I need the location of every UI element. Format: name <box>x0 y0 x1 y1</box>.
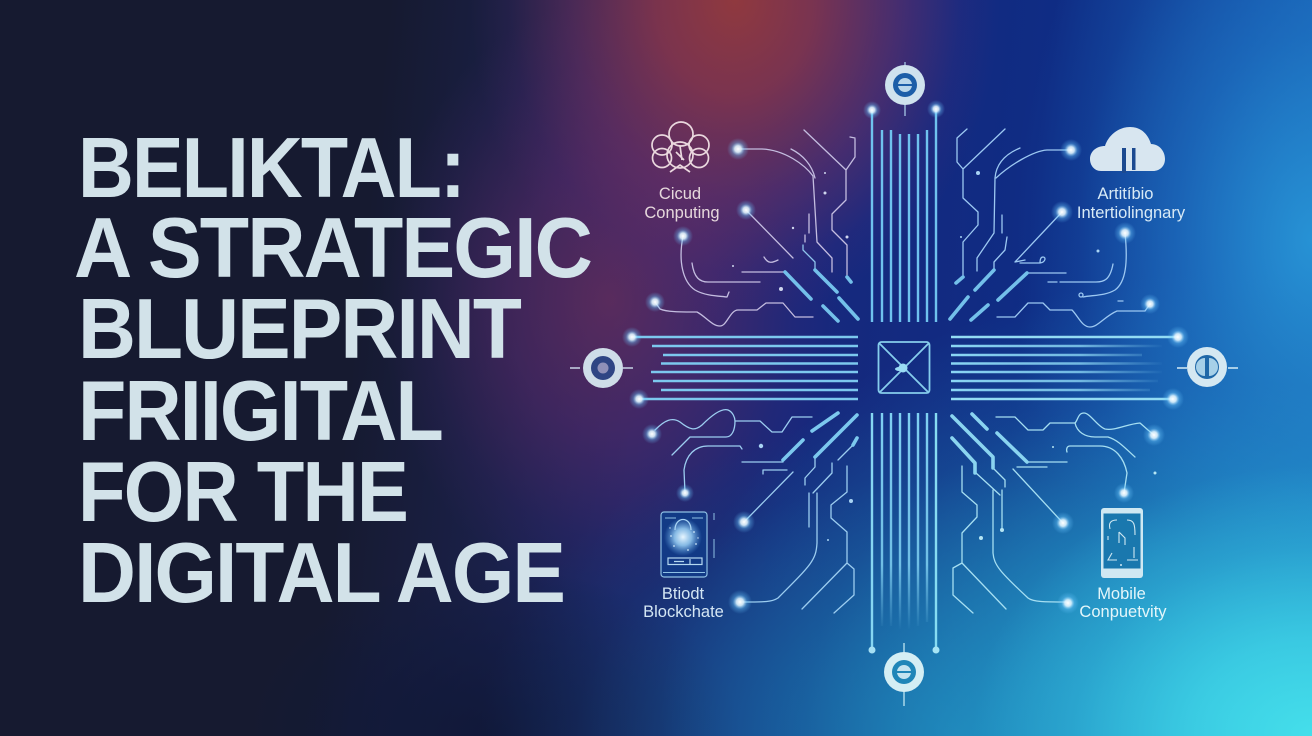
title line 1: BELIKTAL: <box>78 121 464 216</box>
label: cloud computing: Cicud <box>659 185 701 203</box>
node: top <box>885 62 925 116</box>
center processor square <box>878 342 930 393</box>
title line 4: FRIIGITAL <box>78 364 442 459</box>
top vertical bus lines <box>872 110 936 322</box>
title line 3: BLUEPRINT <box>78 282 522 377</box>
circuit traces top-right <box>950 129 1150 327</box>
label: artificial intelligence: Intertiolingnary <box>1077 204 1186 222</box>
icon group: artificial intelligence <box>1077 127 1186 222</box>
circuit traces bottom-right <box>952 413 1156 613</box>
icon: flower network <box>652 122 709 172</box>
label: blockchain: Btiodt <box>662 585 705 603</box>
right horizontal bus lines <box>951 337 1178 399</box>
glowing endpoints <box>622 100 1189 654</box>
label: cloud computing: Conputing <box>644 204 720 222</box>
label: blockchain: Blockchate <box>643 603 724 621</box>
icon: cloud <box>1090 127 1165 173</box>
central circuit diagram <box>570 62 1238 706</box>
icon group: cloud computing <box>644 122 720 222</box>
icon group: mobile connectivity <box>1079 508 1167 621</box>
node: right <box>1177 347 1238 387</box>
label: artificial intelligence: Artitíbio <box>1098 185 1153 203</box>
left horizontal bus lines <box>633 337 858 399</box>
title line 5: FOR THE <box>78 445 407 540</box>
label: mobile connectivity: Conpuetvity <box>1079 603 1167 621</box>
node: left <box>570 348 633 388</box>
circuit traces bottom-left <box>655 410 857 613</box>
node: bottom <box>884 643 924 706</box>
title <box>74 121 592 621</box>
icon group: blockchain <box>643 512 724 621</box>
title line 6: DIGITAL AGE <box>78 526 564 621</box>
icon: tablet with lock <box>661 512 714 577</box>
title line 2: A STRATEGIC <box>74 201 592 296</box>
label: mobile connectivity: Mobile <box>1097 585 1146 603</box>
icon: smartphone <box>1101 508 1143 578</box>
circuit traces top-left <box>655 130 858 326</box>
bottom vertical bus lines <box>872 413 936 650</box>
